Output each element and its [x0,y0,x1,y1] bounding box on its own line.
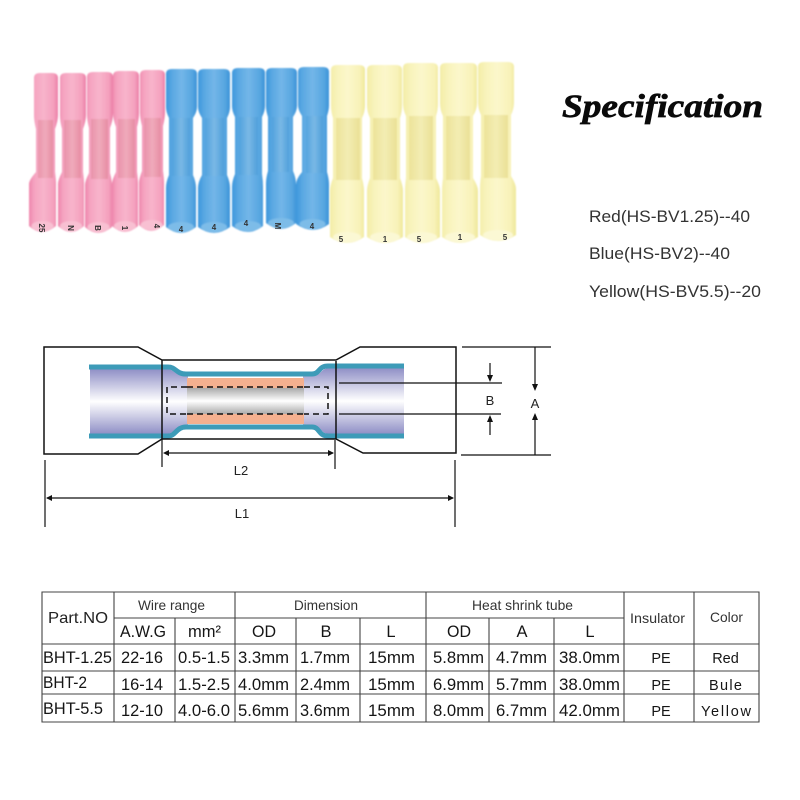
table header: L [386,623,396,641]
dimension B: B [486,393,494,408]
row: BHT-5.5: 6.7mm [496,702,547,720]
dimension A: A [531,396,540,411]
specification table [42,592,759,722]
row: BHT-5.5: 42.0mm [559,702,620,720]
inner tube and crimp barrel [89,366,404,436]
row: BHT-1.25: 1.7mm [300,649,350,667]
connector end markings: 1 [458,233,463,242]
row: BHT-2: 15mm [368,676,415,694]
connector end markings: 5 [339,235,344,244]
quantity: blue: Blue(HS-BV2)--40 [589,245,730,263]
table header: Dimension [294,597,358,613]
connector end markings: 4 [212,223,217,232]
quantity: red: Red(HS-BV1.25)--40 [589,208,750,226]
row: BHT-2: 2.4mm [300,676,350,694]
row: BHT-1.25: 38.0mm [559,649,620,667]
connector end markings: M [273,223,282,230]
dimension A [461,347,551,455]
connector end markings: 1 [120,226,129,231]
row: BHT-2: 4.0mm [238,676,289,694]
table header: Part.NO [48,610,108,627]
row: BHT-2: BHT-2 [43,674,87,692]
quantity list [589,208,761,301]
row: BHT-1.25: Red [712,651,739,667]
row: BHT-5.5: PE [651,704,671,720]
table grid [42,592,759,722]
row: BHT-5.5: 12-10 [121,702,163,720]
row: BHT-2: 38.0mm [559,676,620,694]
table header: A.W.G [120,623,166,641]
dimension B [339,363,502,435]
table header: B [320,623,332,641]
connector end markings: 4 [310,222,315,231]
connector end markings: 5 [503,233,508,242]
title: Specification: Specification [562,89,763,125]
table header: OD [447,623,471,641]
row: BHT-2: 16-14 [121,676,163,694]
dimension L2: L2 [234,463,248,478]
sleeve outline [44,347,456,454]
dimension L1: L1 [235,506,249,521]
blue connectors group [166,67,329,233]
row: BHT-1.25 [43,649,739,667]
row: BHT-2: 6.9mm [433,676,484,694]
yellow connectors group [330,62,516,243]
row: BHT-5.5: BHT-5.5 [43,700,103,718]
table header [48,597,743,641]
row: BHT-1.25: 4.7mm [496,649,547,667]
table header: Heat shrink tube [472,597,573,613]
row: BHT-5.5: 4.0-6.0 [178,702,230,720]
row: BHT-2 [43,674,742,694]
row: BHT-1.25: 15mm [368,649,415,667]
connector end markings: N [66,225,75,231]
row: BHT-1.25: BHT-1.25 [43,649,112,667]
row: BHT-5.5: Yellow [701,704,752,720]
row: BHT-2: 1.5-2.5 [178,676,230,694]
row: BHT-1.25: 22-16 [121,649,163,667]
dimension L2 [162,440,335,478]
connector end markings: B [93,225,102,231]
table header: A [516,623,528,641]
row: BHT-5.5: 8.0mm [433,702,484,720]
row: BHT-1.25: 3.3mm [238,649,289,667]
table header: Color [710,609,743,625]
dimension L1 [45,460,455,527]
table header: L [585,623,595,641]
row: BHT-5.5: 5.6mm [238,702,289,720]
row: BHT-1.25: PE [651,651,671,667]
row: BHT-5.5: 15mm [368,702,415,720]
table header: OD [252,623,276,641]
connector end markings: 5 [417,235,422,244]
row: BHT-1.25: 5.8mm [433,649,484,667]
photo: heat shrink connectors [29,62,516,244]
connector end markings: 1 [383,235,388,244]
red connectors group [29,70,165,233]
row: BHT-5.5 [43,700,752,720]
connector end markings [37,219,508,244]
table header: Wire range [138,597,205,613]
table header: Insulator [630,610,685,626]
row: BHT-2: PE [651,678,671,694]
connector end markings: 4 [244,219,249,228]
table header: mm² [188,623,222,641]
row: BHT-5.5: 3.6mm [300,702,350,720]
row: BHT-1.25: 0.5-1.5 [178,649,230,667]
diagram: connector cross-section with dimensions [44,347,551,527]
connector end markings: 25 [37,224,46,233]
connector end markings: 4 [152,224,161,229]
row: BHT-2: Bule [709,678,742,694]
row: BHT-2: 5.7mm [496,676,547,694]
quantity: yellow: Yellow(HS-BV5.5)--20 [589,283,761,301]
connector end markings: 4 [179,225,184,234]
